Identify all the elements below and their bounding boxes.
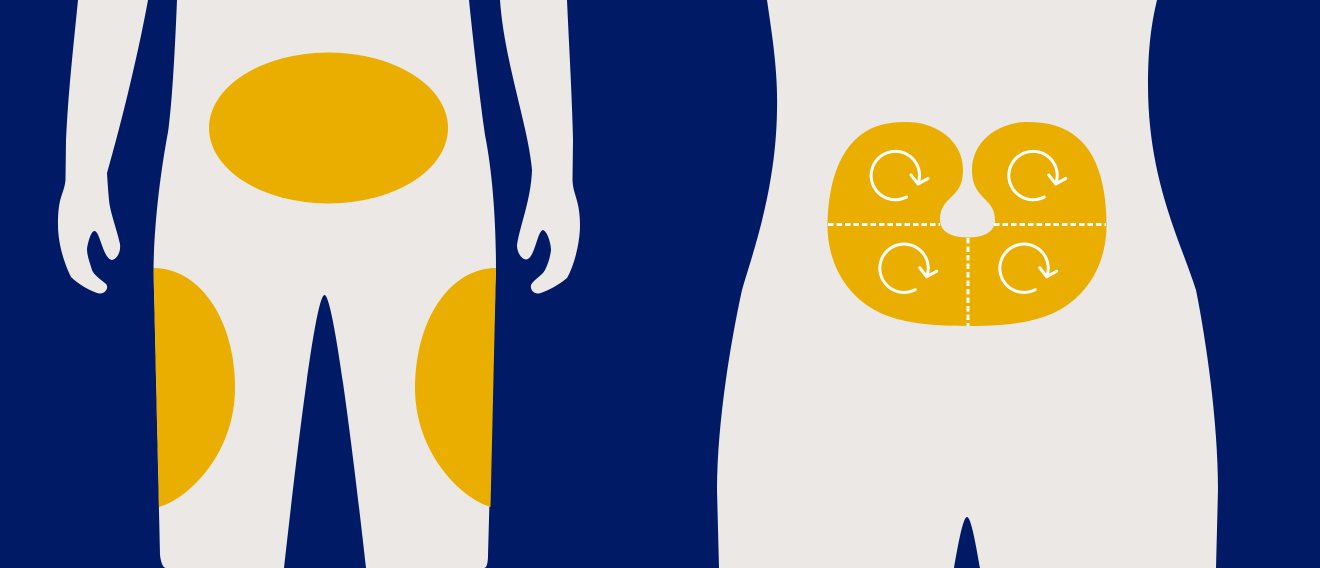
icon: rotation arrow, bottom left — [880, 244, 937, 292]
injection zone: right thigh — [415, 268, 496, 507]
injection zone: around the navel — [828, 122, 1106, 326]
abdomen silhouette — [717, 0, 1218, 568]
left arm and hand — [58, 0, 148, 294]
injection zone: abdomen — [209, 52, 448, 204]
dashed dividers — [828, 224, 1106, 326]
icon: rotation arrow, top right — [1009, 151, 1066, 200]
icon: rotation arrow, top left — [871, 151, 928, 200]
torso and legs — [154, 0, 496, 568]
panel: close-up of abdomen — [717, 0, 1218, 568]
panel: front view of lower body — [58, 0, 580, 568]
icon: rotation arrow, bottom right — [1000, 244, 1057, 292]
right arm and hand — [500, 0, 580, 294]
injection zone: left thigh — [154, 268, 235, 507]
